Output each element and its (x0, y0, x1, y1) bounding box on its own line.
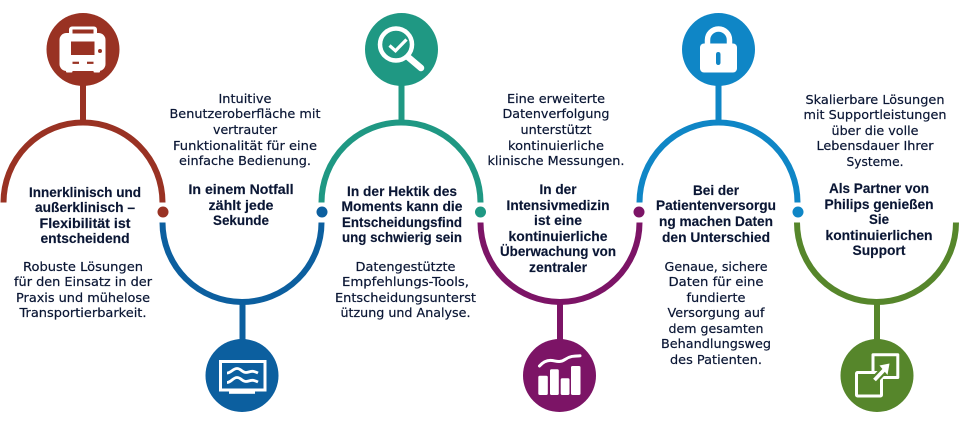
text block: Skalierbare Lösungen: mit Supportleistungen (804, 107, 946, 122)
text block: Datenverfolgung: Eine erweiterte (507, 91, 605, 106)
text block: Patientenversorgung: Patientenversorgu (656, 198, 776, 213)
icon: waveform monitor (220, 362, 265, 394)
text block: Innerklinisch: für den Einsatz in der (14, 274, 153, 289)
text block: Patientenversorgung: Behandlungsweg (661, 336, 771, 351)
text block: Datenverfolgung: In der (540, 182, 577, 197)
step 1: red arc with icon (4, 13, 168, 218)
text block: Innerklinisch: Praxis und mühelose (16, 290, 150, 305)
text block: Datenverfolgung: unterstützt (520, 122, 592, 137)
text block: Benutzeroberfläche: Funktionalität für eine (173, 138, 317, 153)
text block: Patientenversorgung: den Unterschied (662, 230, 770, 245)
text block: Hektik des Moments (335, 184, 476, 320)
text block: Benutzeroberfläche (170, 91, 321, 228)
text block: Hektik des Moments: Datengestützte (356, 259, 456, 274)
text block: Skalierbare Lösungen: Skalierbare Lösungen (806, 92, 944, 107)
step 3: teal arc with icon (322, 13, 486, 218)
text block: Skalierbare Lösungen: über die volle (832, 123, 919, 138)
text block: Patientenversorgung: fundierte (686, 290, 746, 305)
text block: Patientenversorgung: Versorgung auf (668, 305, 765, 320)
step 6: green arc with icon (797, 222, 956, 412)
text block: Skalierbare Lösungen: Support (852, 243, 906, 258)
text block: Datenverfolgung: kontinuierliche (508, 229, 608, 244)
text block: Benutzeroberfläche: einfache Bedienung. (179, 153, 311, 168)
text block: Innerklinisch: außerklinisch – (35, 200, 135, 215)
step 4: purple arc with icon (480, 206, 644, 412)
icon: bar chart with trend line (538, 356, 580, 395)
icon: portable monitor (60, 26, 106, 72)
text block: Patientenversorgung: dem gesamten (668, 321, 764, 336)
text block: Patientenversorgung: des Patienten. (670, 352, 762, 367)
text block: Innerklinisch: Innerklinisch und (29, 185, 141, 200)
text block: Benutzeroberfläche: Intuitive (218, 91, 272, 106)
text block: Hektik des Moments: Entscheidungsfind (342, 215, 462, 230)
text block: Innerklinisch: Transportierbarkeit. (18, 305, 146, 320)
text block: Innerklinisch: Flexibilität ist (40, 216, 131, 231)
text block: Benutzeroberfläche: vertrauter (213, 122, 278, 137)
text block: Datenverfolgung: klinische Messungen. (488, 153, 624, 168)
text block: Innerklinisch: entscheidend (40, 231, 130, 246)
text block: Datenverfolgung: Datenverfolgung (502, 106, 610, 121)
text block: Patientenversorgung: Bei der (693, 183, 740, 198)
icon: expanding squares with arrow (856, 355, 898, 396)
text block: Datenverfolgung: ist eine (534, 213, 582, 228)
text block: Benutzeroberfläche: Benutzeroberfläche mit (170, 106, 321, 121)
text block: Hektik des Moments: Entscheidungsunterst (335, 290, 476, 305)
text block: Patientenversorgung (656, 183, 776, 367)
text block: Skalierbare Lösungen: Systeme. (846, 154, 904, 169)
text block: Patientenversorgung: ng machen Daten (659, 214, 773, 229)
text block: Skalierbare Lösungen (804, 92, 946, 258)
text block: Patientenversorgung: Genaue, sichere (664, 259, 768, 274)
text block: Datenverfolgung: kontinuierliche (508, 138, 604, 153)
text block: Hektik des Moments: ützung und Analyse. (340, 305, 470, 320)
text block: Benutzeroberfläche: Sekunde (213, 213, 269, 228)
text block: Datenverfolgung: Intensivmedizin (506, 198, 610, 213)
text block: Datenverfolgung: Überwachung von (500, 244, 616, 259)
text block: Innerklinisch (14, 185, 153, 320)
text block: Datenverfolgung: zentraler (529, 260, 588, 275)
icon: padlock (700, 29, 737, 73)
text block: Hektik des Moments: ung schwierig sein (342, 230, 462, 245)
text block: Skalierbare Lösungen: kontinuierlichen (826, 228, 932, 243)
text block: Benutzeroberfläche: In einem Notfall (188, 182, 294, 197)
icon: magnifier with check (380, 28, 421, 68)
text block: Hektik des Moments: Empfehlungs-Tools, (342, 274, 469, 289)
text block: Benutzeroberfläche: zählt jede (208, 198, 274, 213)
text block: Hektik des Moments: Moments kann die (342, 199, 463, 214)
text block: Datenverfolgung (488, 91, 624, 275)
text block: Skalierbare Lösungen: Lebensdauer Ihrer (816, 138, 934, 153)
text block: Skalierbare Lösungen: Philips genießen (824, 197, 934, 212)
step 5: light blue arc with icon (640, 13, 804, 218)
text block: Skalierbare Lösungen: Sie (869, 212, 889, 227)
text block: Skalierbare Lösungen: Als Partner von (829, 181, 929, 196)
step 2: dark blue arc with icon (162, 206, 328, 412)
text block: Patientenversorgung: Daten für eine (668, 274, 764, 289)
text block: Hektik des Moments: In der Hektik des (347, 184, 457, 199)
text block: Innerklinisch: Robuste Lösungen (23, 259, 143, 274)
